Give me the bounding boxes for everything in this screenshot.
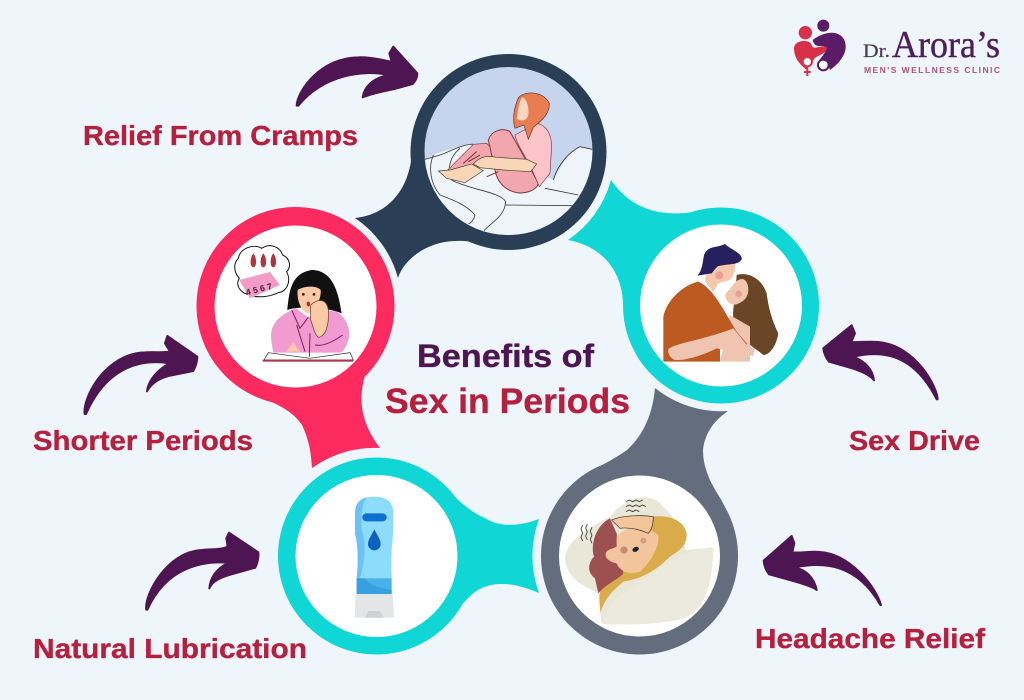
label: natural lubrication: Natural Lubrication [33, 633, 307, 664]
illustration: woman at book with calendar cloud [235, 246, 353, 362]
arrow: to relief from cramps [297, 47, 417, 106]
icon: lubricant bottle [355, 497, 394, 618]
arrow: to sex drive [823, 325, 938, 399]
illustration: woman with headache in bed [565, 497, 713, 624]
arrow: to shorter periods [85, 336, 197, 414]
logo: Dr. Arora's Men's Wellness Clinic: Dr. [863, 41, 890, 62]
logo: Dr. Arora's Men's Wellness Clinic: MEN'S WELLNESS CLINIC [864, 65, 1000, 75]
arrow: to headache relief [764, 536, 881, 605]
label: relief from cramps: Relief From Cramps [83, 120, 358, 151]
label: shorter periods: Shorter Periods [33, 425, 253, 456]
illustration: woman holding her legs on bed [423, 93, 593, 240]
panel: relief from cramps node [355, 54, 606, 278]
title: Benefits of [417, 338, 594, 374]
panel: shorter periods node [196, 207, 394, 468]
title: Sex in Periods [385, 382, 630, 421]
label: sex drive: Sex Drive [849, 425, 980, 456]
logo: Dr. Arora's Men's Wellness Clinic [794, 20, 1000, 76]
panel: sex drive node [568, 180, 819, 404]
illustration: woman at book with calendar cloud: 4567 [245, 281, 273, 297]
illustration: kissing couple [663, 244, 778, 362]
panel: headache relief node [541, 388, 738, 654]
logo: Dr. Arora's Men's Wellness Clinic: Arora’s [892, 24, 1000, 66]
label: headache relief: Headache Relief [755, 623, 986, 654]
arrow: to natural lubrication [146, 533, 258, 610]
icon: logo figures [794, 20, 846, 76]
panel: natural lubrication node [278, 458, 539, 654]
title [385, 338, 630, 421]
